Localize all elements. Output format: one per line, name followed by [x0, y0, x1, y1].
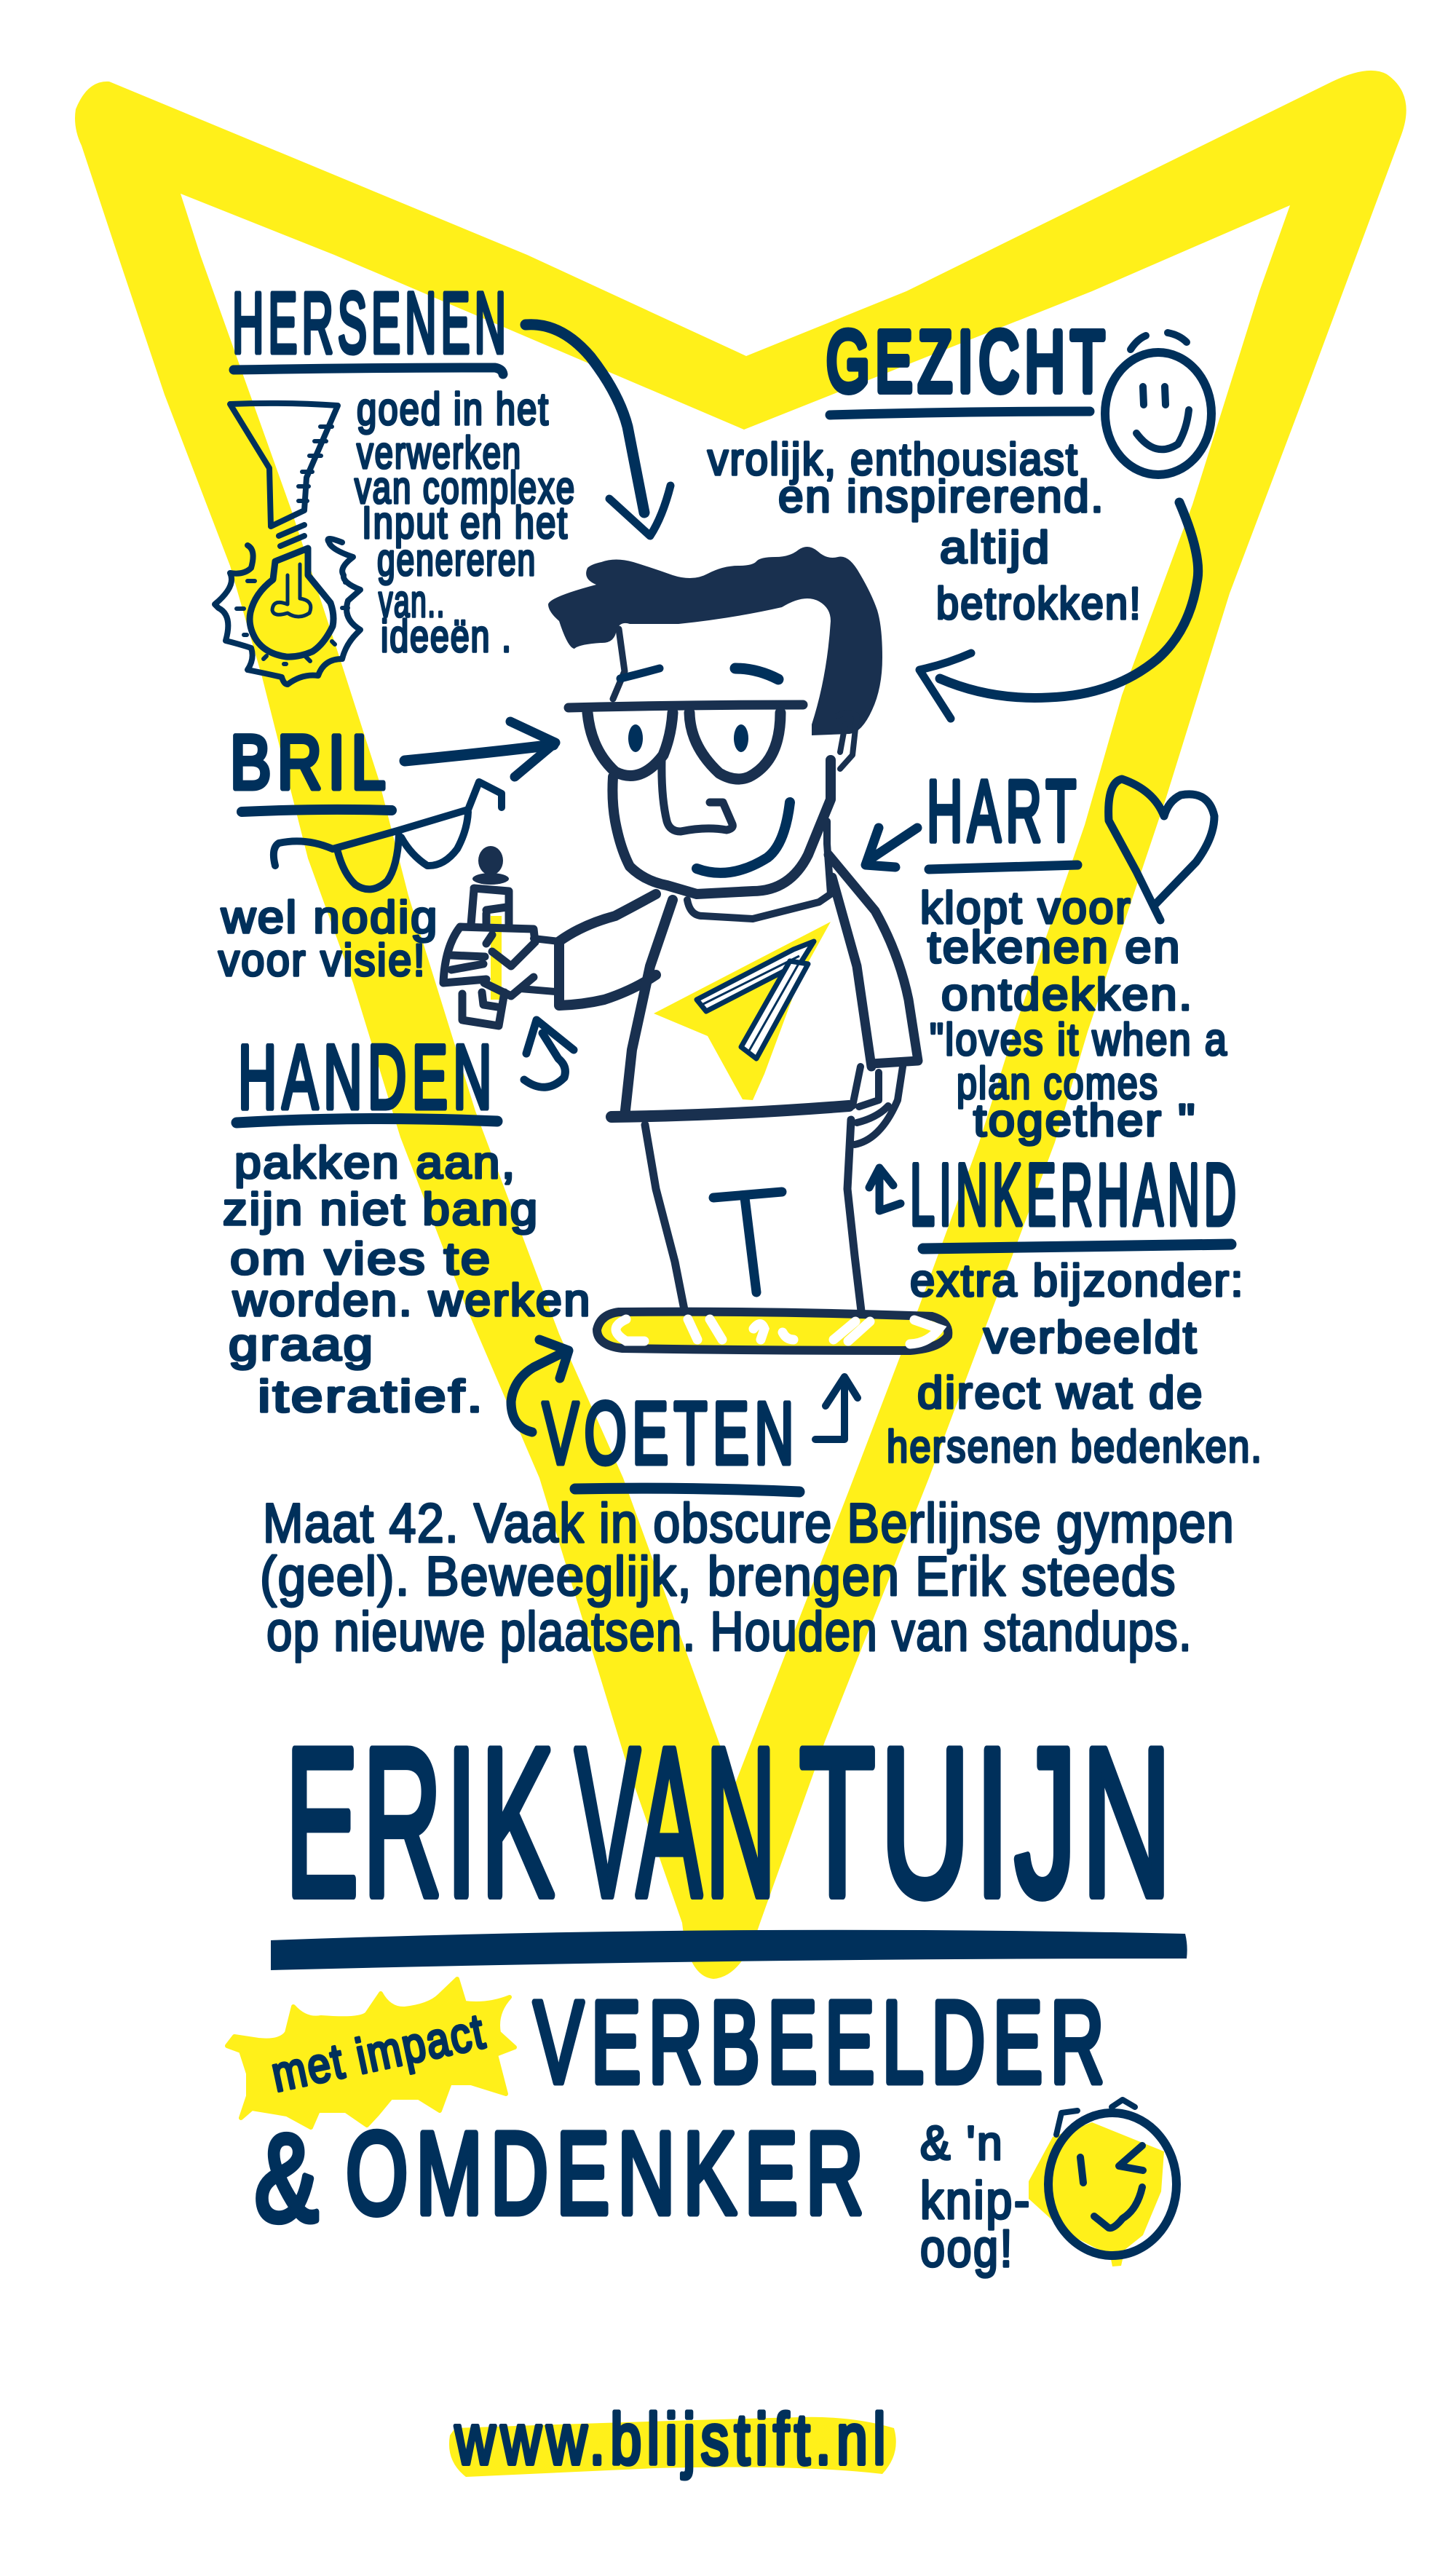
- text: voeten description: op nieuwe plaatsen. Houden van standups.: [266, 1601, 1192, 1663]
- text: handen description: [223, 1138, 592, 1422]
- text: voeten description: [260, 1493, 1235, 1663]
- text: bril description: voor visie!: [218, 936, 427, 986]
- subtitle: [227, 1977, 1176, 2278]
- text: handen description: pakken aan,: [234, 1138, 517, 1188]
- text: hersenen description: [355, 384, 576, 662]
- arrow: gezicht to head: [919, 502, 1198, 719]
- text: linkerhand description: extra bijzonder:: [910, 1256, 1245, 1306]
- section: hersenen: [215, 275, 670, 684]
- text: handen description: worden. werken: [232, 1276, 592, 1326]
- shirt yellow triangle: [654, 922, 831, 1100]
- url text: www.blijstift.nl: [454, 2399, 891, 2479]
- head and face: [569, 629, 857, 894]
- text: hersenen description: van complexe: [355, 463, 576, 513]
- icon: funnel and light bulb: [215, 403, 360, 684]
- text: gezicht description: vrolijk, enthousiast: [708, 435, 1079, 485]
- title: Erik van Tuijn: VAN: [575, 1704, 780, 1940]
- icon: small glasses: [274, 782, 502, 889]
- hair: [548, 547, 882, 735]
- legs and T mark: [645, 1120, 862, 1317]
- icon: winking face: [1029, 2100, 1176, 2266]
- heading: hart: HART: [927, 762, 1081, 860]
- text: bril description: wel nodig: [221, 893, 439, 943]
- text: linkerhand description: hersenen bedenken.: [887, 1422, 1263, 1472]
- text: handen description: zijn niet bang: [223, 1185, 539, 1235]
- title underline bar: [271, 1930, 1187, 1970]
- text: ampersand: &: [255, 2109, 318, 2248]
- text: hart description: klopt voor: [920, 883, 1132, 933]
- text: hersenen description: ideeën .: [381, 612, 513, 662]
- heading: gezicht: GEZICHT: [826, 314, 1110, 410]
- title: Erik van Tuijn: ERIK: [285, 1704, 558, 1940]
- heading: handen: HANDEN: [238, 1027, 497, 1128]
- text: en knipoog: oog!: [920, 2220, 1014, 2278]
- underline: handen: [237, 1118, 497, 1123]
- text: en knipoog: [920, 2116, 1032, 2278]
- pencils on shirt: [697, 941, 814, 1059]
- text: hart description: plan comes: [957, 1059, 1159, 1109]
- heading: voeten: VOETEN: [542, 1383, 799, 1482]
- section: gezicht: [708, 314, 1211, 719]
- section: linkerhand: [869, 1146, 1263, 1472]
- right hand: [852, 1067, 903, 1145]
- section: handen: [223, 1020, 592, 1422]
- arrow: voeten right: [815, 1377, 858, 1439]
- character: Erik: [443, 547, 948, 1351]
- arrow: linkerhand to hand: [869, 1168, 901, 1211]
- shoes: [597, 1312, 948, 1351]
- text: hart description: together ": [973, 1096, 1197, 1146]
- text: voeten description: Maat 42. Vaak in obscure Berlijnse gympen: [263, 1493, 1235, 1554]
- text: hersenen description: verwerken: [357, 428, 522, 478]
- badge: met impact: met impact: [266, 2003, 491, 2103]
- text: linkerhand description: verbeeldt: [984, 1313, 1198, 1363]
- text: en knipoog: & 'n: [920, 2116, 1004, 2170]
- arrow: hersenen to head: [526, 325, 670, 536]
- text: hart description: tekenen en: [927, 922, 1182, 973]
- arrow: bril to glasses: [405, 722, 555, 777]
- text: bril description: [218, 893, 439, 986]
- heading: bril: BRIL: [230, 720, 392, 805]
- text: verbeelder: VERBEELDER: [534, 1977, 1112, 2107]
- text: gezicht description: betrokken!: [936, 579, 1142, 629]
- highlight bar: [449, 2417, 896, 2477]
- underline: linkerhand: [923, 1244, 1231, 1249]
- text: omdenker: OMDENKER: [346, 2108, 871, 2238]
- icon: heart: [1109, 779, 1214, 920]
- text: hart description: [920, 883, 1228, 1146]
- text: voeten description: (geel). Beweeglijk, brengen Erik steeds: [260, 1546, 1176, 1608]
- text: linkerhand description: [887, 1256, 1263, 1472]
- section: hart: [866, 762, 1228, 1146]
- arrow: hart to chest: [866, 828, 917, 867]
- yellow V background shape: [75, 71, 1406, 1979]
- text: gezicht description: altijd: [940, 523, 1051, 573]
- arrow: handen to hand: [524, 1020, 574, 1087]
- text: handen description: graag: [229, 1320, 375, 1370]
- website footer: [449, 2399, 896, 2479]
- badge: met impact: [227, 1979, 515, 2127]
- text: linkerhand description: direct wat de: [917, 1368, 1204, 1418]
- underline: voeten: [575, 1488, 799, 1492]
- shirt and arms: [521, 821, 918, 1117]
- section: voeten: [260, 1340, 1235, 1663]
- text: handen description: om vies te: [230, 1234, 492, 1284]
- underline: gezicht: [830, 411, 1090, 415]
- left hand holding marker: [443, 846, 535, 1026]
- text: handen description: iteratief.: [258, 1372, 485, 1422]
- text: en knipoog: knip-: [920, 2172, 1032, 2230]
- text: hart description: "loves it when a: [930, 1015, 1228, 1065]
- text: hersenen description: van..: [379, 577, 446, 627]
- underline: bril: [242, 810, 392, 812]
- underline: hersenen: [234, 368, 503, 374]
- heading: hersenen: HERSENEN: [232, 275, 510, 371]
- section: bril: [218, 720, 555, 986]
- title: Erik van Tuijn: TUIJN: [799, 1704, 1176, 1940]
- text: gezicht description: [708, 435, 1142, 629]
- text: hart description: ontdekken.: [941, 970, 1194, 1020]
- text: hersenen description: genereren: [377, 535, 537, 585]
- underline: hart: [929, 865, 1077, 869]
- text: gezicht description: en inspirerend.: [778, 472, 1105, 522]
- title: Erik van Tuijn: [285, 1704, 1176, 1940]
- text: hersenen description: Input en het: [362, 498, 569, 548]
- text: hersenen description: goed in het: [357, 384, 550, 435]
- icon: smiley: [1105, 333, 1211, 475]
- arrow: voeten left: [511, 1340, 569, 1432]
